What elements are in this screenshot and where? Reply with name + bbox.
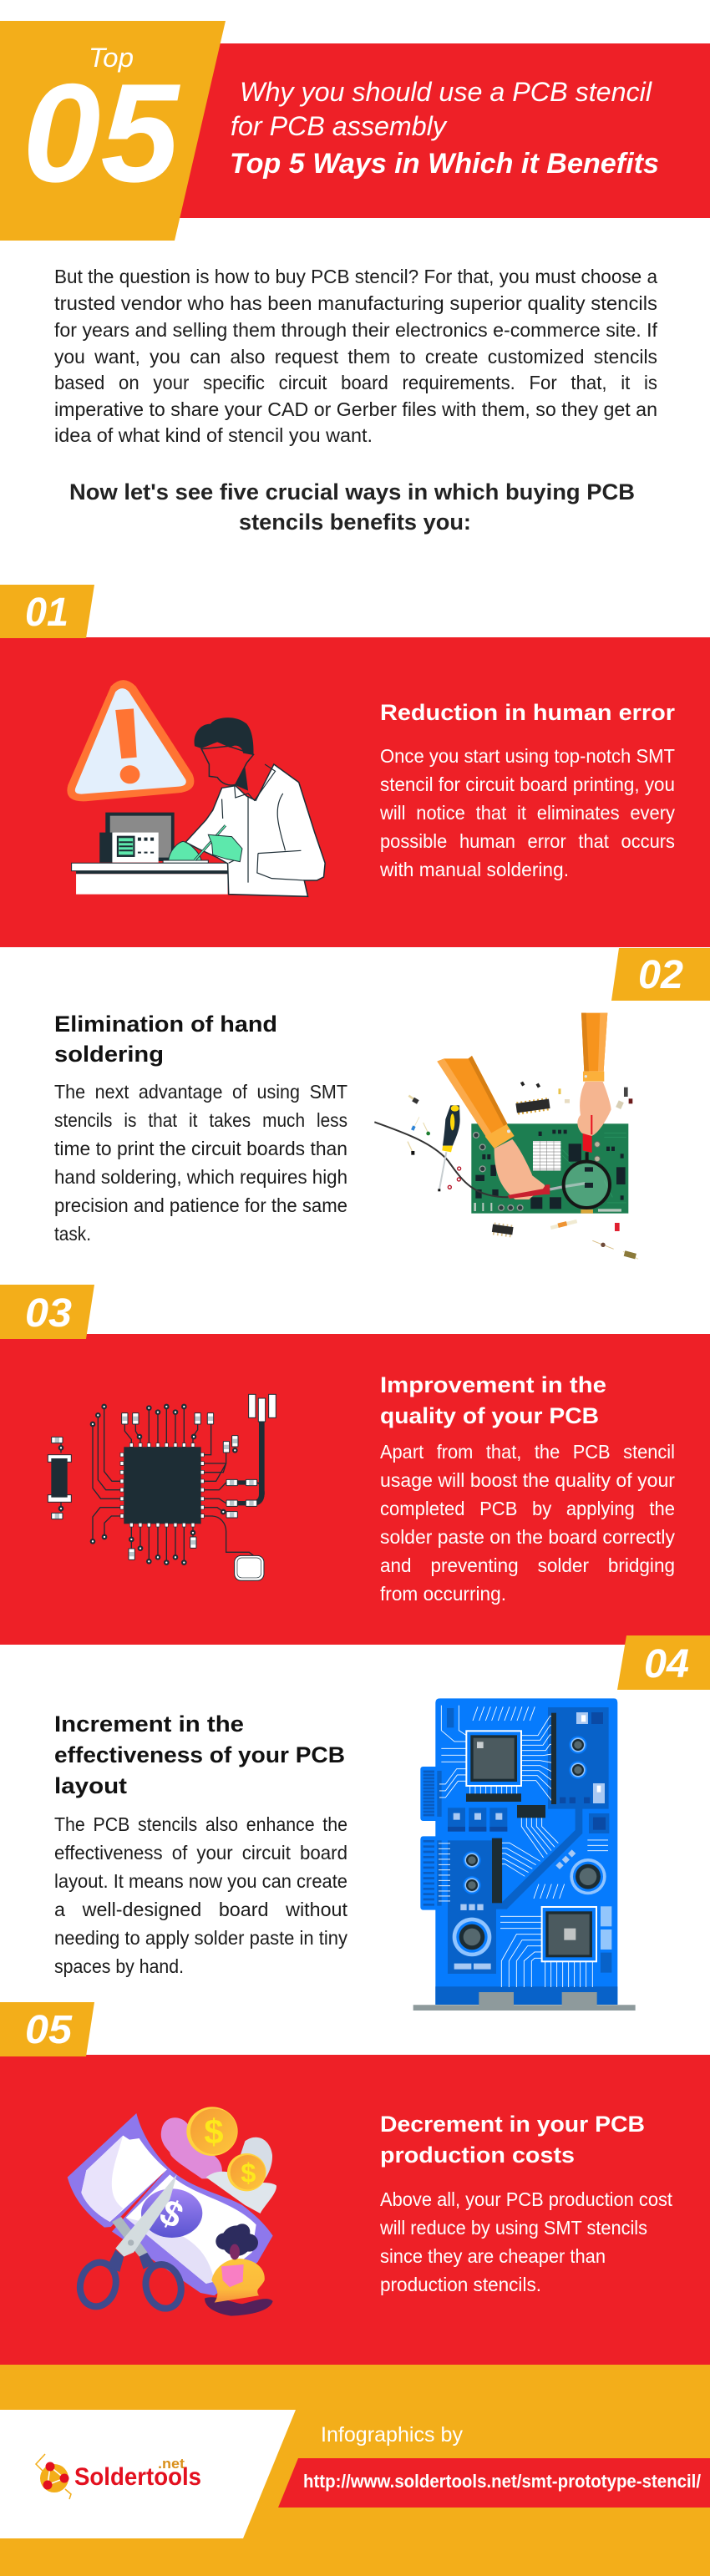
number badge 04: 04 — [644, 1642, 689, 1686]
number badge 03 — [0, 1285, 94, 1339]
thick power trace — [232, 1422, 261, 1504]
title text: Top 5 Ways in Which it Benefits — [230, 148, 659, 180]
large capacitor — [48, 1455, 71, 1502]
number badge 01 — [0, 585, 94, 638]
panel: section 2 elimination of hand soldering — [54, 948, 710, 1259]
illustration: warning sign and technician — [67, 680, 325, 896]
seated person with book — [205, 2224, 273, 2316]
number badge 05 — [0, 2002, 94, 2056]
logo: soldertools — [36, 2454, 201, 2499]
heading — [54, 1711, 345, 1798]
number badge 01: 01 — [25, 591, 68, 635]
number badge 02 — [611, 948, 710, 1001]
microchip top — [466, 1731, 521, 1786]
title text: for PCB assembly — [231, 111, 448, 141]
body text: completed PCB by applying the — [380, 1498, 675, 1519]
big number 05: 05 — [23, 54, 181, 211]
body text: production stencils. — [380, 2274, 541, 2295]
red url bar — [278, 2458, 710, 2508]
person in lab coat — [185, 718, 325, 896]
panel: section 1 reduction in human error — [0, 585, 710, 947]
yellow badge — [0, 21, 226, 241]
heading: quality of your PCB — [380, 1403, 599, 1428]
body text: hand soldering, which requires high — [54, 1166, 347, 1188]
round capacitors — [453, 1736, 606, 1956]
heading: layout — [54, 1773, 127, 1798]
green board — [471, 1123, 628, 1214]
illustration: blue circuit card — [413, 1698, 636, 2011]
intro paragraph: based on your specific circuit board requirements. For that, it is — [54, 372, 657, 393]
intro paragraph: But the question is how to buy PCB stencil? For that, you must choose a — [54, 266, 657, 287]
title text: Why you should use a PCB stencil — [240, 77, 652, 107]
resistors — [52, 1413, 257, 1559]
label: Top: Top — [89, 43, 134, 73]
edge connector fingers — [423, 1772, 434, 1904]
body text: task. — [54, 1223, 91, 1245]
body text: The next advantage of using SMT — [54, 1081, 347, 1103]
body text: will reduce by using SMT stencils — [379, 2217, 647, 2239]
body text: Above all, your PCB production cost — [380, 2188, 673, 2210]
body text: The PCB stencils also enhance the — [54, 1813, 347, 1835]
credit label: Infographics by — [321, 2423, 463, 2447]
heading: Improvement in the — [380, 1372, 606, 1397]
panel: section 3 improvement in quality — [0, 1285, 710, 1645]
workbench and machine — [72, 813, 232, 895]
body text: a well-designed board without — [54, 1899, 348, 1920]
heading: production costs — [380, 2142, 575, 2168]
header banner — [0, 21, 710, 241]
body text: Apart from that, the PCB stencil — [380, 1441, 675, 1463]
heading: Reduction in human error — [380, 700, 676, 725]
heading — [380, 2112, 645, 2168]
heading: Decrement in your PCB — [380, 2112, 645, 2137]
intro paragraph: imperative to share your CAD or Gerber files with them, so they get an — [54, 398, 657, 420]
intro paragraph — [54, 266, 658, 446]
number badge 02: 02 — [638, 953, 683, 997]
body text: Once you start using top-notch SMT — [380, 745, 675, 767]
heat sink — [533, 1141, 560, 1171]
body text: with manual soldering. — [379, 859, 569, 880]
body text: time to print the circuit boards than — [54, 1138, 347, 1159]
sub-heading — [69, 479, 635, 535]
grey mounting bracket — [413, 1992, 636, 2011]
heading — [380, 1372, 606, 1428]
heading: Elimination of hand — [54, 1012, 277, 1037]
icon: warning triangle — [67, 680, 194, 801]
body text: layout. It means now you can create — [54, 1870, 347, 1892]
soldering cable — [374, 1122, 508, 1197]
gold coins — [186, 2107, 266, 2191]
body text: will notice that it eliminates every — [379, 802, 675, 824]
intro paragraph: you want, you can also request them to create customized stencils — [54, 346, 657, 368]
body text — [54, 1813, 348, 1977]
sub-heading: stencils benefits you: — [239, 510, 471, 535]
dark header strips — [466, 1713, 556, 1903]
heading: effectiveness of your PCB — [54, 1742, 345, 1767]
panel: section 5 decrement in production costs — [0, 2002, 710, 2365]
sub-heading: Now let's see five crucial ways in which buying PCB — [69, 479, 635, 505]
body text: possible human error that occurs — [380, 830, 675, 852]
number badge 04 — [617, 1635, 710, 1690]
illustration: scissors cutting a banknote — [68, 2107, 276, 2316]
intro paragraph: for years and selling them through their electronics e-commerce site. If — [54, 319, 658, 341]
via dots — [58, 1404, 238, 1565]
logo: soldertools: .net — [158, 2456, 185, 2472]
heading — [54, 1012, 277, 1067]
number badge 03: 03 — [25, 1291, 72, 1336]
body text: spaces by hand. — [54, 1955, 184, 1977]
small light components — [448, 1712, 611, 1970]
illustration: hands soldering a green circuit board — [374, 1013, 638, 1259]
body text: since they are cheaper than — [380, 2245, 606, 2267]
circuit traces — [61, 1407, 264, 1563]
panel: section 4 increment in effectiveness — [54, 1635, 710, 2011]
body text — [379, 745, 675, 880]
red title band — [167, 43, 710, 218]
heading: soldering — [54, 1042, 164, 1067]
microchip bottom — [542, 1907, 596, 1961]
darker board zones — [435, 1707, 617, 2005]
banknote lower piece — [112, 2168, 273, 2295]
body text: solder paste on the board correctly — [380, 1526, 675, 1548]
white logo panel — [0, 2410, 296, 2538]
square pad — [235, 1555, 264, 1580]
body text — [379, 2188, 673, 2295]
chip pins — [120, 1443, 204, 1527]
soldering iron — [508, 1184, 586, 1199]
left arm and hand — [437, 1056, 545, 1199]
intro paragraph: idea of what kind of stencil you want. — [54, 424, 373, 446]
magnifier and right arm — [564, 1013, 611, 1214]
body text — [54, 1081, 347, 1245]
body text: stencils is that it takes much less — [54, 1109, 347, 1131]
body text: stencil for circuit board printing, you — [380, 773, 675, 795]
body text: effectiveness of your circuit board — [54, 1842, 347, 1864]
body text: usage will boost the quality of your — [380, 1469, 675, 1491]
banknote lower piece: $ — [154, 2192, 189, 2237]
title text — [230, 77, 659, 180]
scissors — [75, 2174, 186, 2312]
gold coins: $ — [241, 2158, 256, 2188]
red band — [0, 2055, 710, 2365]
logo: soldertools: Soldertools — [74, 2463, 201, 2491]
body text — [380, 1441, 675, 1605]
body text: from occurring. — [380, 1583, 506, 1605]
body text: needing to apply solder paste in tiny — [54, 1927, 347, 1949]
banknote upper flap — [68, 2113, 169, 2228]
leaves — [161, 2117, 276, 2213]
red band — [0, 637, 710, 947]
board body — [420, 1698, 617, 2005]
number badge 05: 05 — [25, 2008, 73, 2052]
heading: Increment in the — [54, 1711, 244, 1737]
header pins — [249, 1394, 276, 1422]
chip package — [124, 1447, 201, 1524]
body text: precision and patience for the same — [54, 1194, 347, 1216]
gold coins: $ — [204, 2112, 224, 2152]
illustration: circuit chip with traces — [48, 1394, 276, 1580]
footer — [0, 2365, 710, 2576]
screwdriver — [438, 1105, 460, 1191]
white traces — [439, 1706, 608, 1987]
yellow background — [0, 2365, 710, 2576]
body text: and preventing solder bridging — [380, 1554, 675, 1576]
red band — [0, 1334, 710, 1645]
loose electronic parts — [408, 1082, 638, 1259]
intro paragraph: trusted vendor who has been manufacturing superior quality stencils — [54, 292, 657, 314]
green gloves and soldering pen — [169, 825, 242, 862]
